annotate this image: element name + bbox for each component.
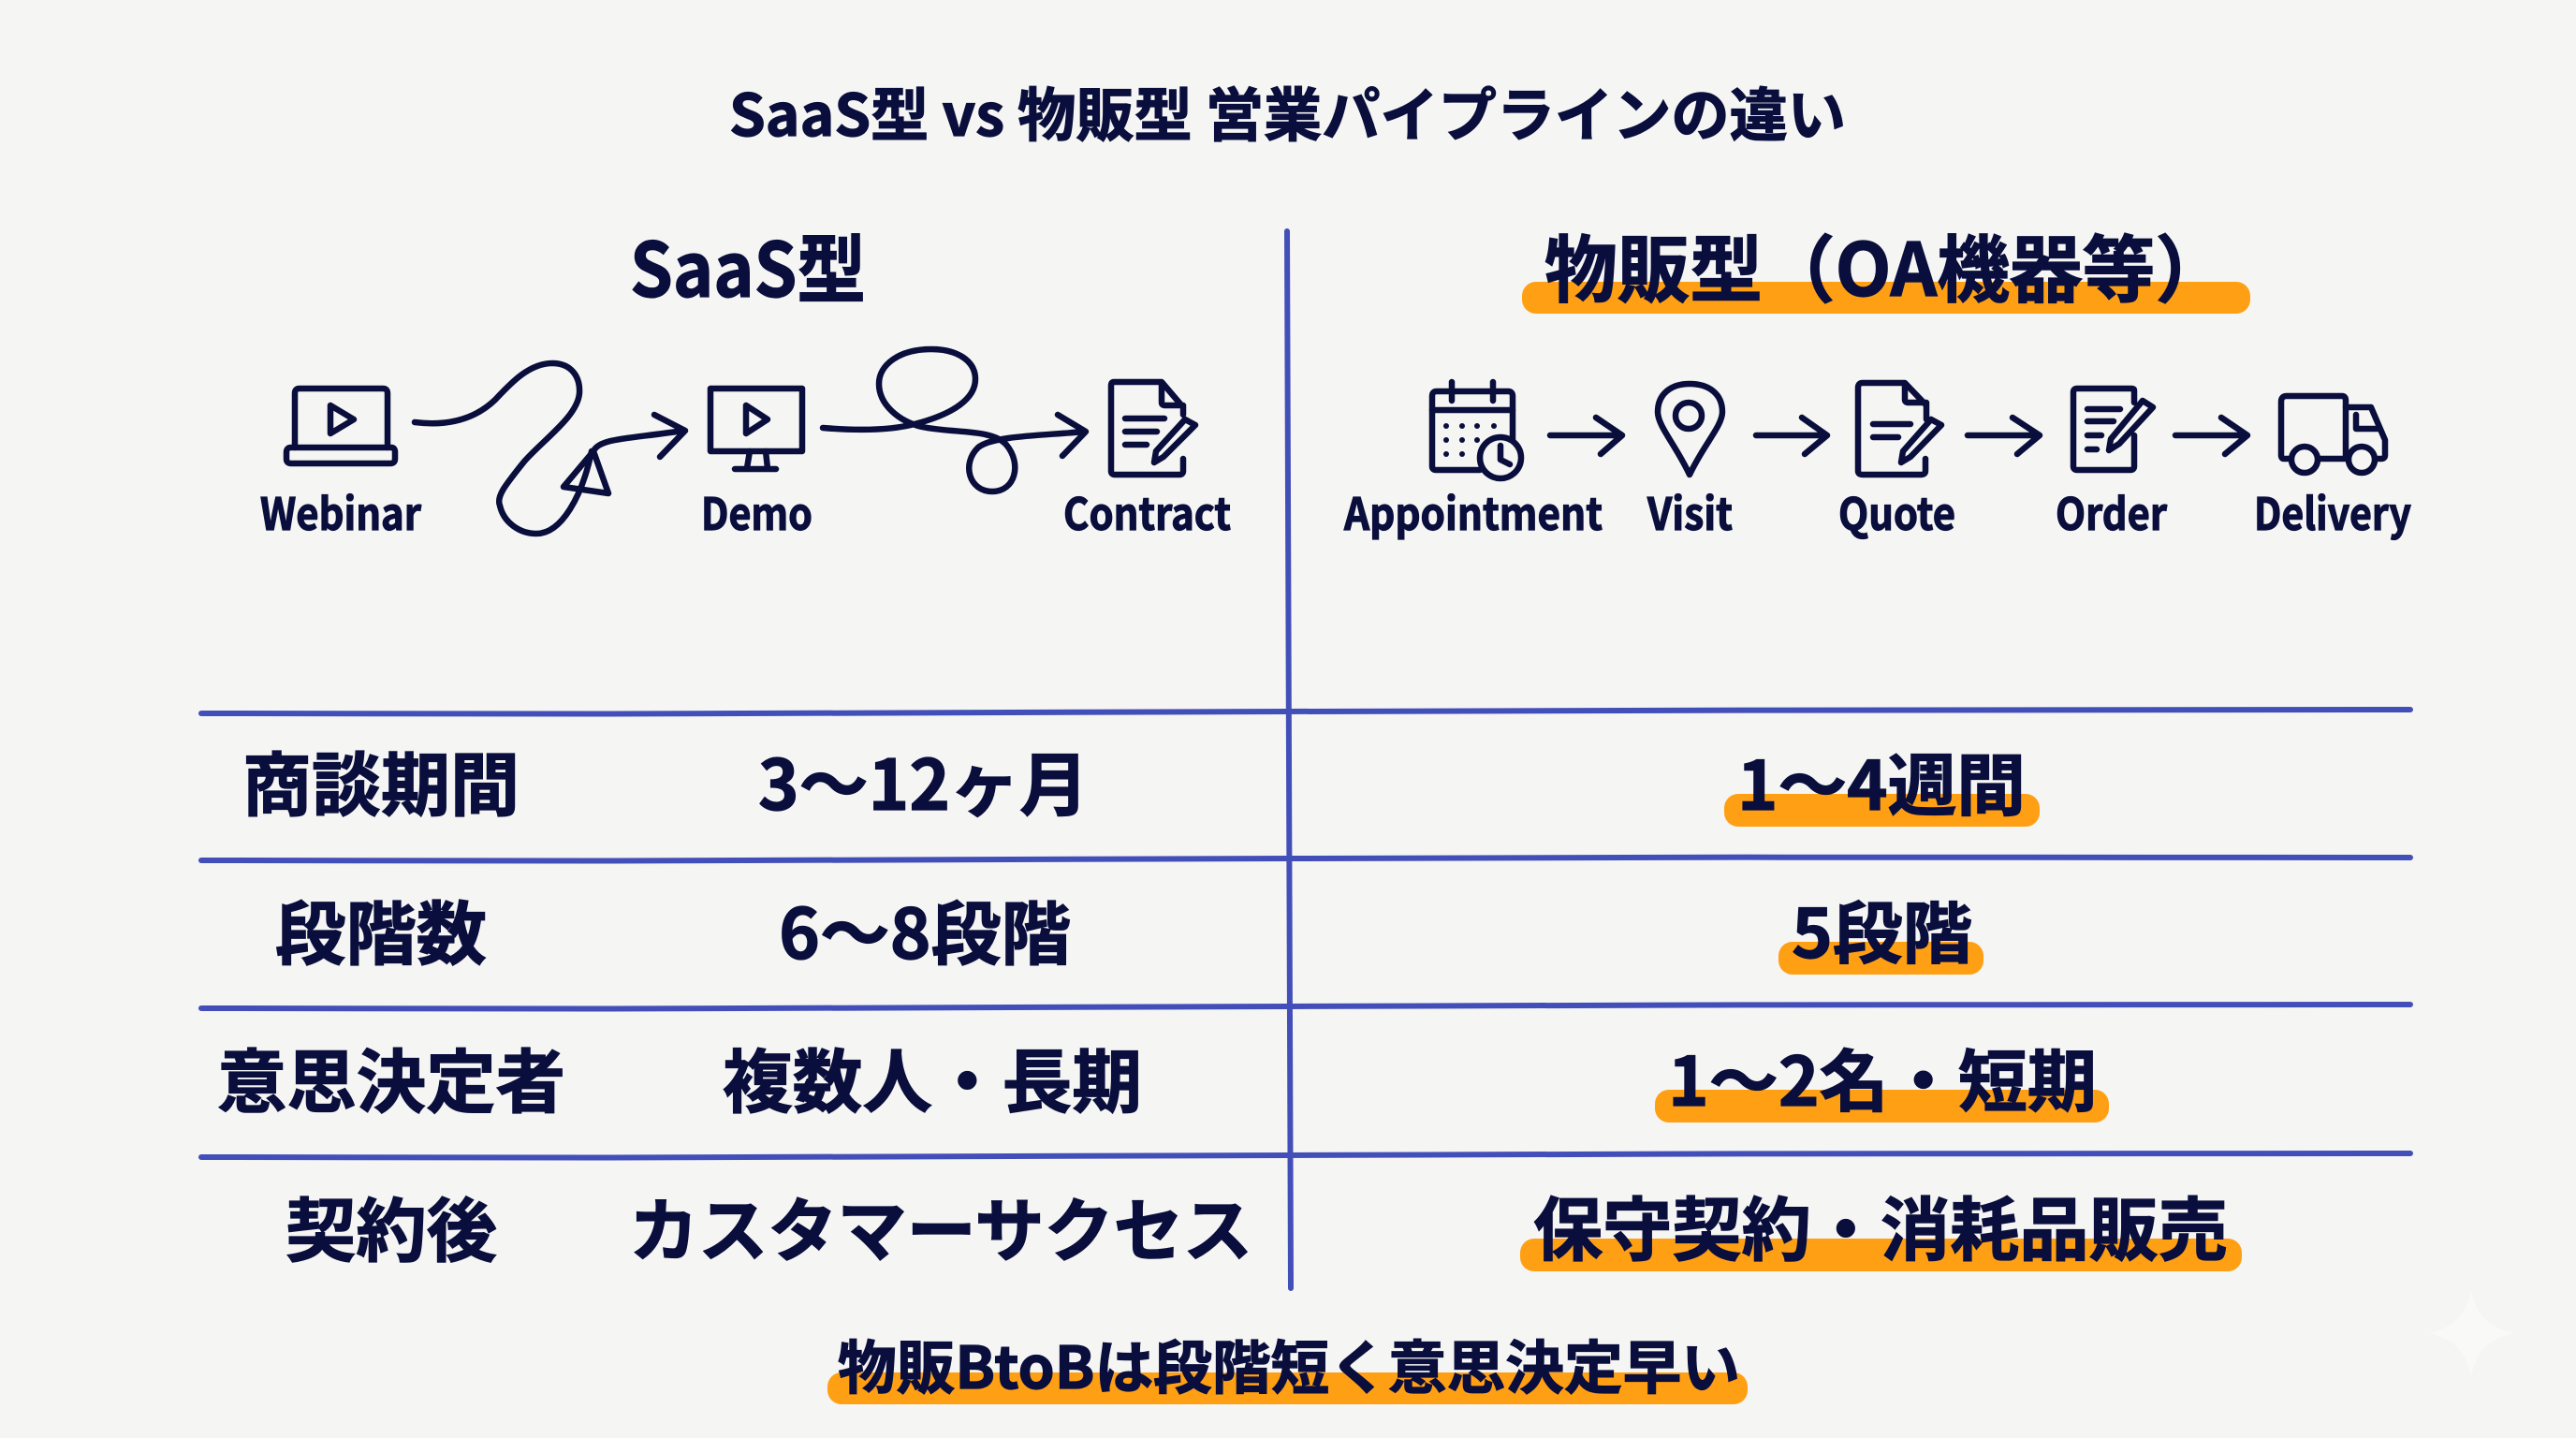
物販 value with highlight: 5段階 — [1792, 879, 1972, 977]
icon: webinar laptop — [286, 389, 395, 463]
label: Appointment: Appointment — [1343, 478, 1603, 543]
heading: SaaS型: SaaS型 — [630, 211, 866, 319]
物販 value with highlight: 1〜2名・短期 — [1668, 1027, 2097, 1125]
icon: contract document — [1111, 382, 1195, 475]
物販 value with highlight: 保守契約・消耗品販売 — [1533, 1175, 2228, 1275]
SaaS value: 3〜12ヶ月 — [758, 730, 1089, 830]
icon: delivery truck — [2281, 396, 2385, 473]
arrow: looping demo to contract — [823, 349, 1086, 492]
row label: 段階数 — [275, 879, 487, 979]
label: Quote: Quote — [1838, 478, 1955, 543]
icon: demo monitor — [710, 389, 802, 469]
title: SaaS型 vs 物販型 営業パイプラインの違い — [729, 68, 1846, 153]
arrow: looping webinar to demo — [415, 363, 685, 534]
label: Visit: Visit — [1647, 478, 1733, 543]
SaaS value: カスタマーサクセス — [629, 1176, 1252, 1276]
row label: 契約後 — [285, 1176, 497, 1276]
label: Contract: Contract — [1063, 478, 1231, 543]
row label: 商談期間 — [242, 730, 520, 830]
takeaway callout: 物販BtoBは段階短く意思決定早い — [838, 1321, 1740, 1405]
icon: map pin — [1658, 384, 1722, 475]
icon: order form — [2073, 389, 2153, 470]
row label: 意思決定者 — [217, 1027, 565, 1127]
arrow — [2175, 418, 2247, 454]
panel: 物販 pipeline — [1343, 213, 2411, 543]
row: 契約後 — [285, 1175, 2242, 1276]
label: Webinar: Webinar — [260, 478, 421, 543]
row: 段階数 — [275, 879, 1983, 979]
物販 value with highlight: 1〜4週間 — [1737, 731, 2026, 829]
icon: quote document — [1858, 383, 1941, 475]
label: Demo: Demo — [701, 478, 812, 543]
icon: watermark sparkle — [2428, 1289, 2514, 1377]
arrow — [1756, 418, 1827, 454]
label: Delivery: Delivery — [2254, 478, 2411, 543]
arrow — [1968, 418, 2040, 454]
SaaS value: 6〜8段階 — [779, 879, 1071, 979]
label: Order: Order — [2056, 478, 2167, 543]
row: 商談期間 — [242, 730, 2040, 830]
panel: SaaS pipeline — [260, 211, 1231, 543]
table grid lines — [201, 231, 2410, 1288]
icon: calendar with clock — [1432, 382, 1521, 478]
row: 意思決定者 — [217, 1027, 2109, 1127]
SaaS value: 複数人・長期 — [723, 1027, 1142, 1127]
arrow — [1550, 418, 1622, 454]
heading: 物販型（OA機器等）: 物販型（OA機器等） — [1544, 213, 2228, 317]
